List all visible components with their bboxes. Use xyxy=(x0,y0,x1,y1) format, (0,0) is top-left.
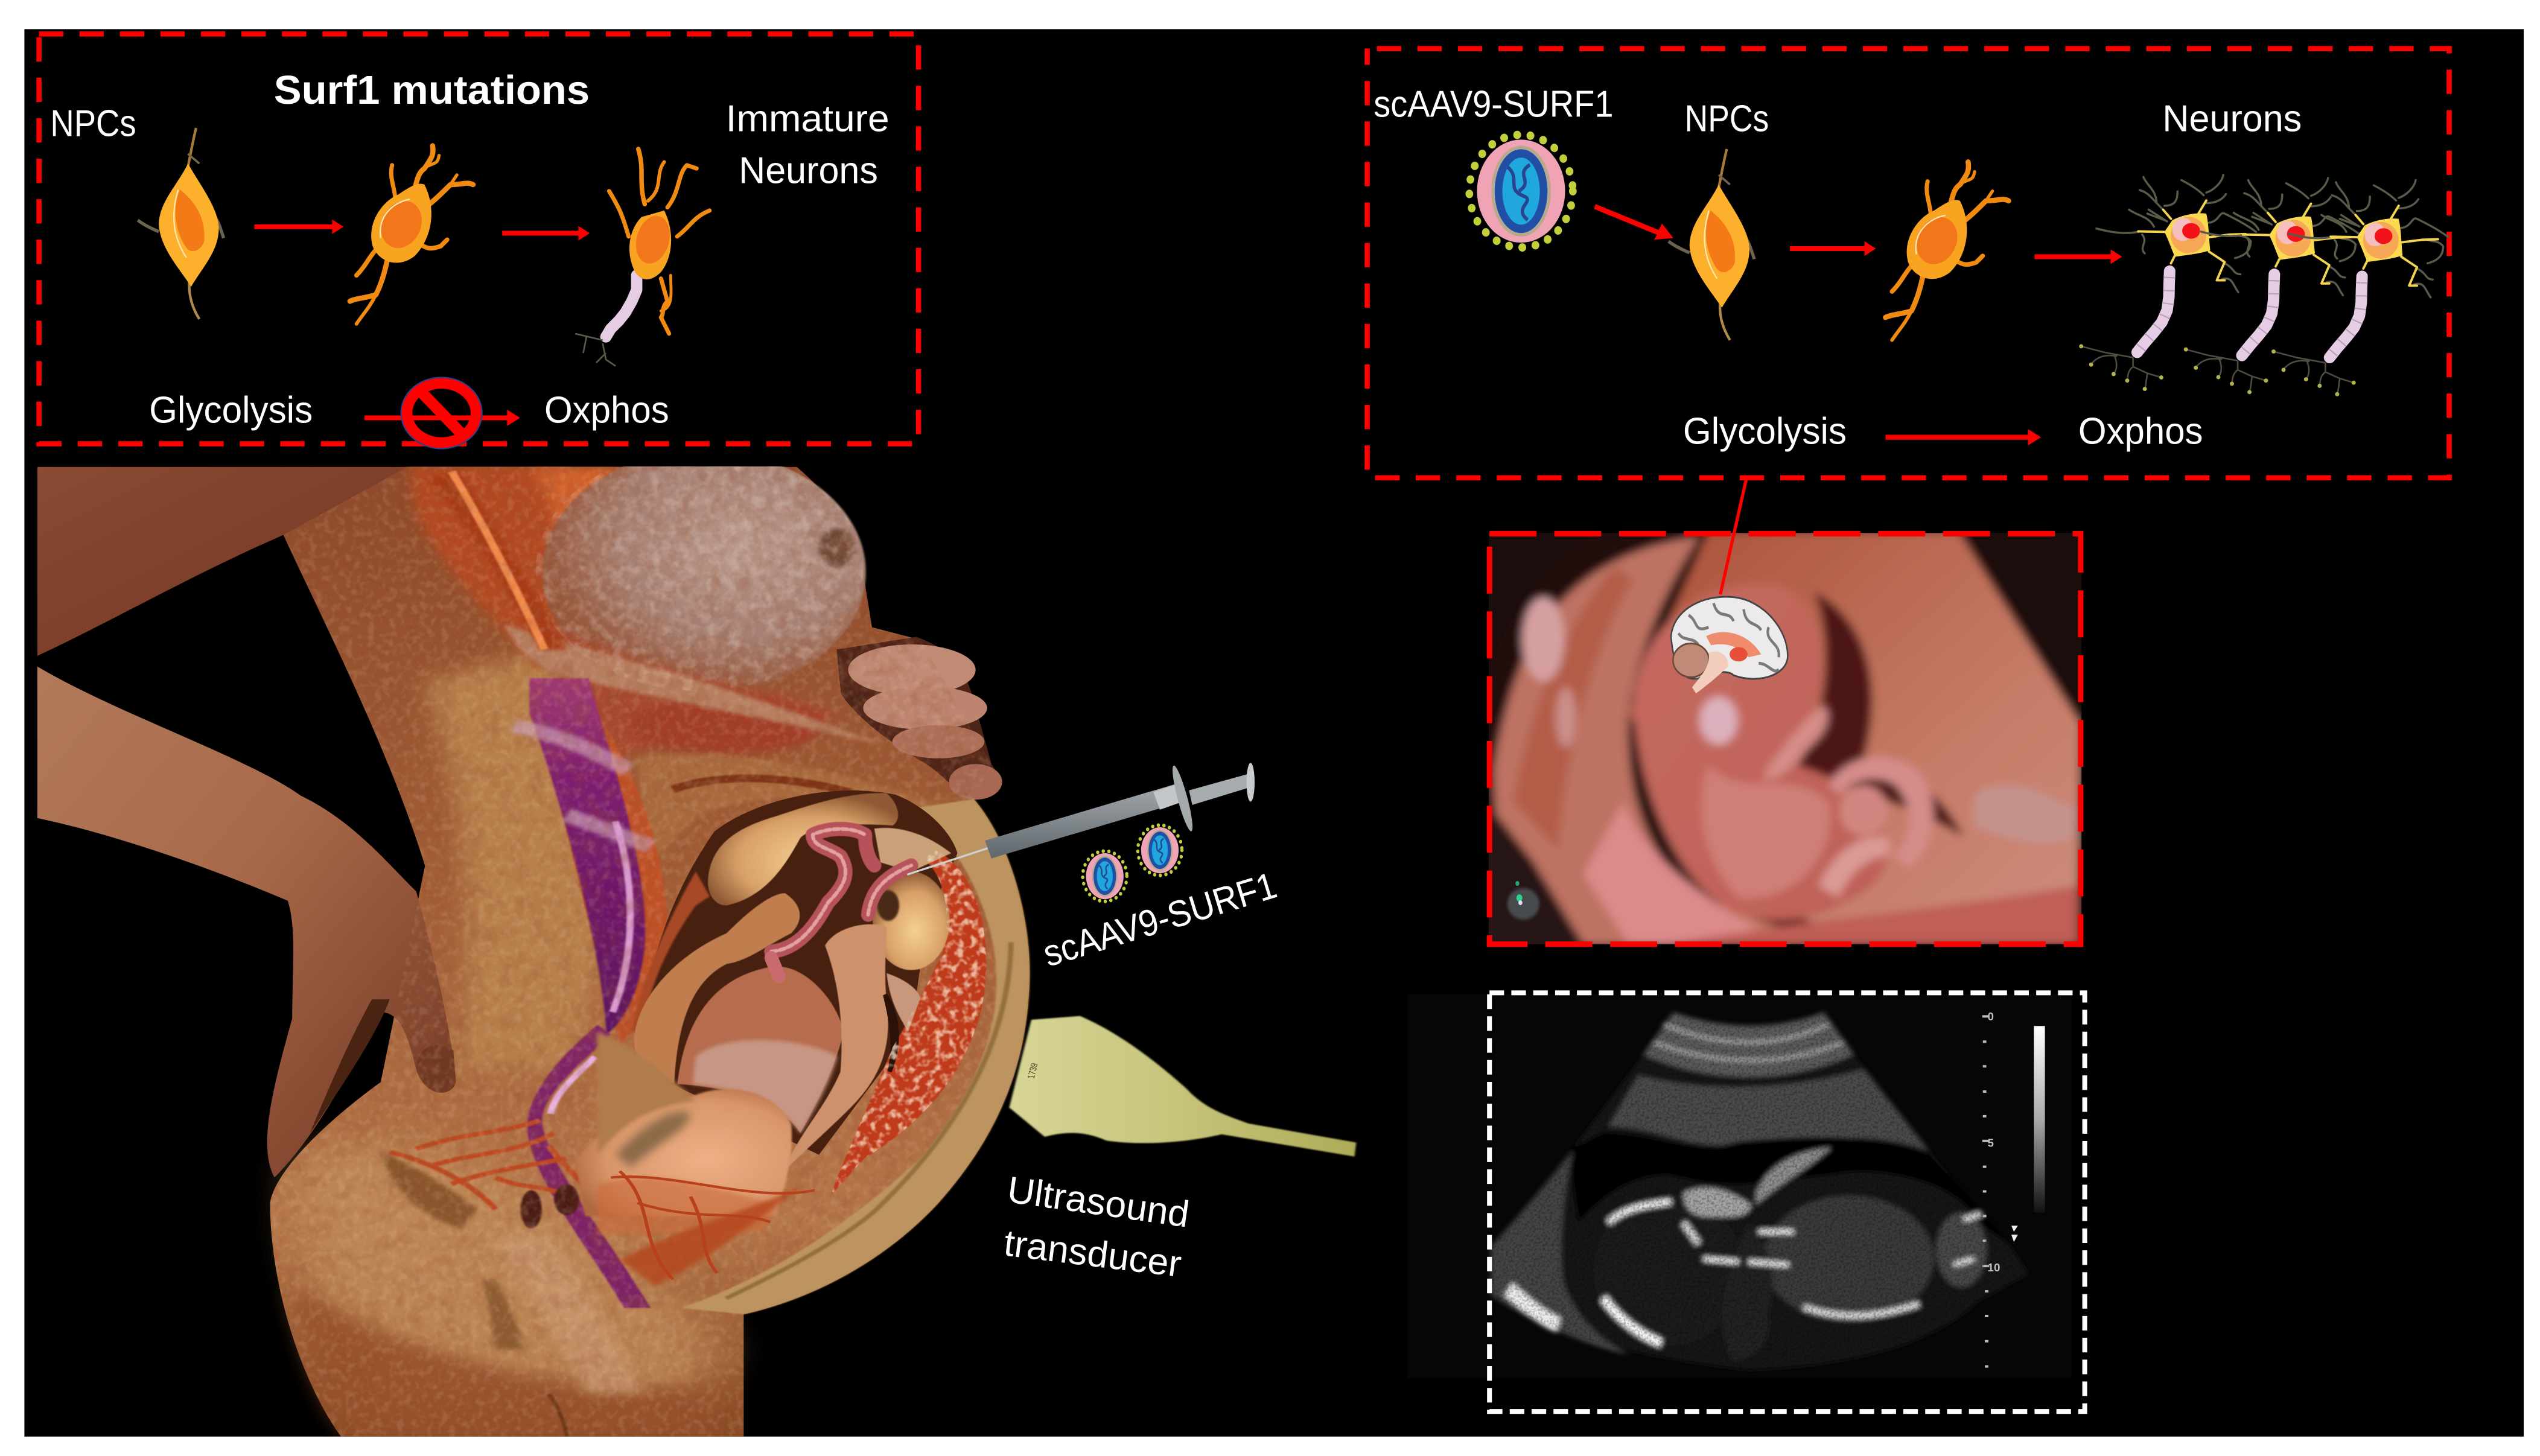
heading: Surf1 mutations: Surf1 mutations xyxy=(274,68,590,113)
arrow: NPC to differentiating cell xyxy=(255,220,343,234)
connector line: panel to fetal brain xyxy=(1720,479,1746,594)
icon: ultrasound transducer xyxy=(1009,1016,1356,1157)
depth scale numbers xyxy=(1988,1010,2000,1274)
icon: ultrasound transducer: 1739 xyxy=(1025,1063,1040,1079)
photo: 2D fetal ultrasound scan xyxy=(1486,990,2087,1414)
depth scale numbers: 0 xyxy=(1988,1010,1994,1023)
arrow: virus to NPC xyxy=(1594,204,1673,240)
label: Oxphos: Oxphos xyxy=(544,390,669,431)
label: scAAV9-SURF1: scAAV9-SURF1 xyxy=(1373,83,1614,125)
label: Immature Neurons: Immature xyxy=(726,98,890,139)
depth scale numbers: 10 xyxy=(1988,1261,2000,1274)
depth scale numbers: 5 xyxy=(1988,1136,1994,1149)
arrow: NPC to differentiating cell xyxy=(1790,241,1876,256)
arrow: blocked glycolysis to Oxphos xyxy=(364,410,520,426)
icon: prohibition sign xyxy=(401,377,482,448)
label: ultrasound transducer: Ultrasound xyxy=(1005,1169,1192,1236)
arrow: to immature neuron xyxy=(502,226,590,241)
illustration: pregnant woman anatomical cutaway xyxy=(24,451,1061,1449)
label: ultrasound transducer: transducer xyxy=(1002,1222,1183,1285)
panel: scAAV9-SURF1 rescue xyxy=(1367,49,2449,478)
icon: syringe xyxy=(907,763,1255,874)
icon: scAAV9 virus xyxy=(1469,135,1573,247)
skin texture xyxy=(270,466,996,1436)
cell: immature neuron xyxy=(575,149,710,366)
label: Glycolysis: Glycolysis xyxy=(1683,410,1847,452)
cell: neural progenitor xyxy=(1669,149,1754,340)
cell: differentiating neuron xyxy=(350,146,473,324)
arrow: glycolysis to Oxphos xyxy=(1885,429,2041,445)
photo border xyxy=(1489,533,2081,944)
uterine wall speckle xyxy=(832,850,986,1193)
photo: 3D fetal ultrasound rendering xyxy=(1487,531,2083,947)
label: scAAV9-SURF1 vector: scAAV9-SURF1 xyxy=(1039,865,1281,975)
label: NPCs: NPCs xyxy=(50,103,136,144)
panel: Surf1 mutations xyxy=(39,34,918,448)
label: Immature Neurons: Neurons xyxy=(739,150,878,191)
panel border xyxy=(1367,49,2449,478)
icon: scAAV9 virus particles xyxy=(1083,825,1182,901)
label: ultrasound transducer xyxy=(1002,1169,1192,1285)
icon: brain xyxy=(1671,597,1787,693)
label: Neurons: Neurons xyxy=(2162,98,2302,139)
label: Oxphos: Oxphos xyxy=(2078,410,2203,452)
label: Glycolysis: Glycolysis xyxy=(149,390,313,431)
arrow: to mature neurons xyxy=(2034,249,2122,264)
label: Immature Neurons xyxy=(726,98,890,191)
label: NPCs: NPCs xyxy=(1685,98,1769,139)
cell: differentiating neuron xyxy=(1885,162,2008,340)
cells: mature neurons xyxy=(2079,175,2448,396)
photo border xyxy=(1489,993,2085,1411)
cell: neural progenitor xyxy=(138,128,224,319)
panel border xyxy=(39,34,918,443)
